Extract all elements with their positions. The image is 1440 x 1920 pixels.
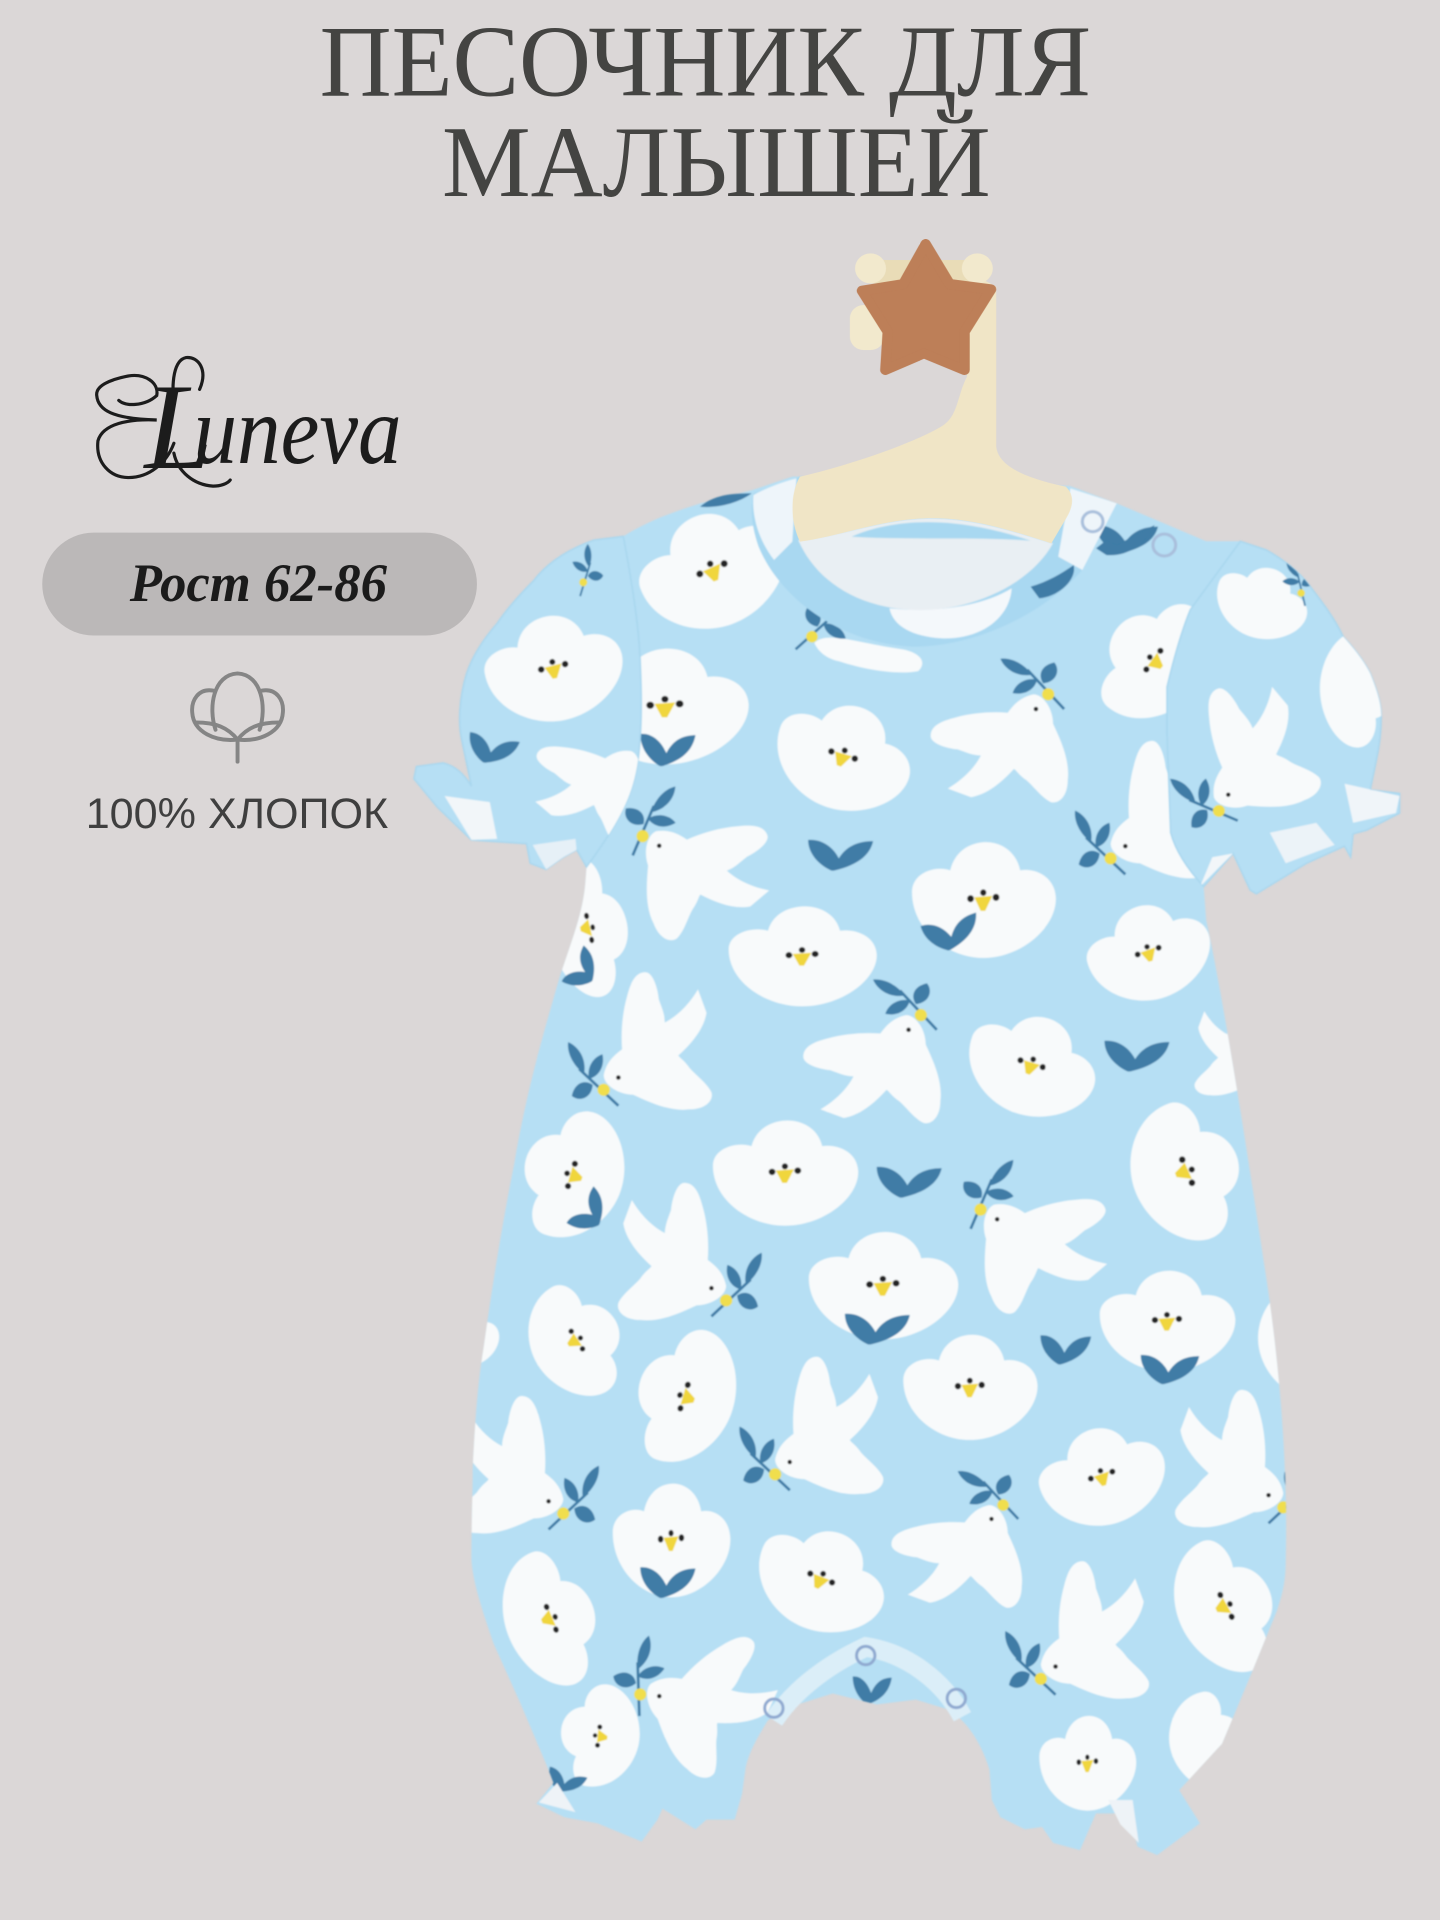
wooden star (862, 244, 991, 370)
fabric print on body (471, 513, 1288, 1812)
brand logo: L (142, 360, 213, 495)
leg ruffle highlights (539, 1783, 1139, 1843)
crotch placket (774, 1647, 962, 1720)
left sleeve fabric (414, 536, 641, 869)
doves on body (455, 602, 1319, 1785)
shoulder snaps (1082, 512, 1176, 556)
right sleeve (1147, 541, 1400, 894)
size badge (42, 533, 477, 636)
right sleeve print (1170, 563, 1400, 885)
hanger arm (792, 270, 1072, 543)
hanger knobs (850, 253, 993, 350)
collar band (752, 477, 1117, 647)
size badge: Рост 62-86 (129, 553, 387, 613)
flowers on body (480, 513, 1286, 1812)
inside back of garment (798, 518, 1053, 610)
collar placket left (753, 478, 796, 560)
collar placket right (1058, 488, 1117, 570)
brand logo (97, 357, 402, 495)
flower seen on collar (889, 588, 1012, 638)
shoulder corner leaf (700, 493, 752, 507)
romper (414, 476, 1400, 1855)
back neck band (852, 522, 1031, 541)
icon: cotton boll (192, 673, 283, 762)
title second line: МАЛЫШЕЙ (442, 105, 991, 218)
title: ПЕСОЧНИК ДЛЯ (320, 5, 1091, 118)
collar leaves (1031, 525, 1155, 598)
romper body fabric (471, 476, 1286, 1855)
crotch snaps (765, 1646, 966, 1717)
brand logo: uneva (193, 377, 402, 485)
left sleeve print (444, 544, 659, 869)
left sleeve (414, 536, 659, 869)
right sleeve fabric (1167, 541, 1400, 894)
material label: 100% ХЛОПОК (86, 790, 388, 838)
leaf pairs on body (544, 525, 1199, 1798)
hanger with wooden star (792, 244, 1072, 543)
neck opening (700, 477, 1176, 647)
